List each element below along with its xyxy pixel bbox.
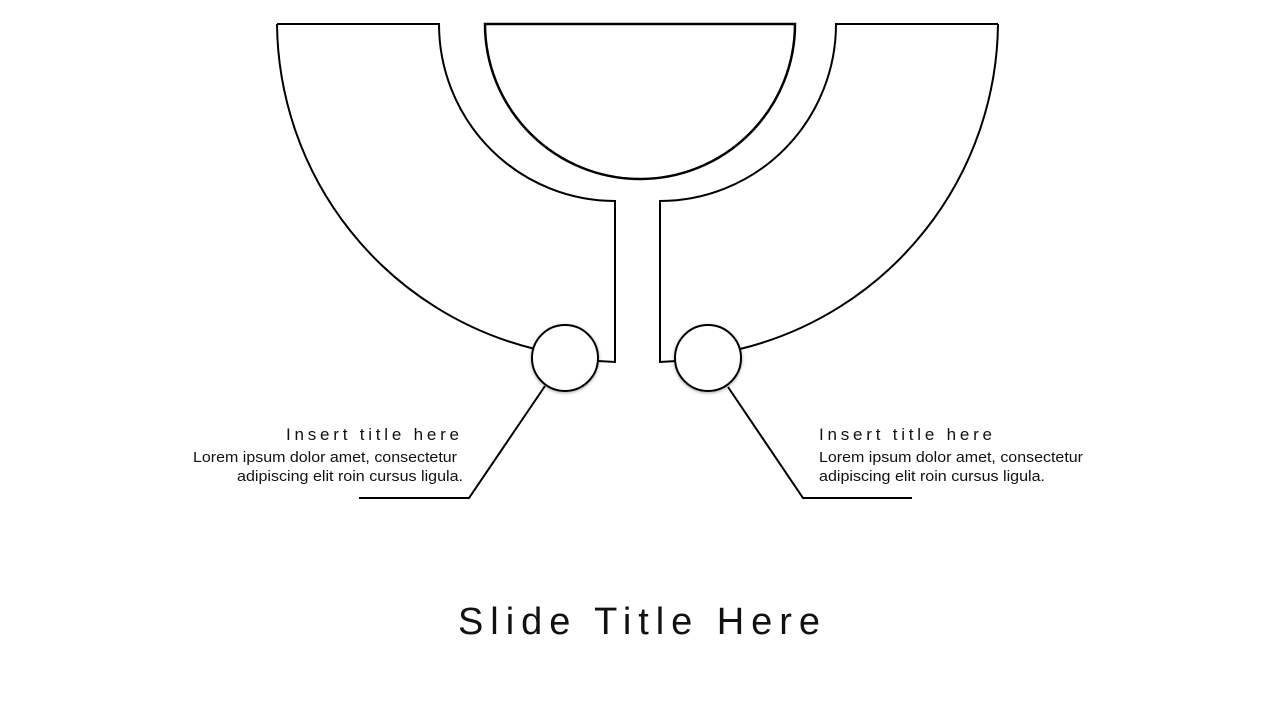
left node circle — [532, 325, 598, 391]
left text block: Insert title here — [286, 425, 459, 444]
right text block: adipiscing elit roin cursus ligula. — [819, 468, 1045, 485]
right text block: Insert title here — [819, 425, 992, 444]
left connector line — [359, 386, 545, 498]
left text block — [193, 425, 463, 485]
right text block: Lorem ipsum dolor amet, consectetur — [819, 449, 1083, 466]
left quarter-ring shape — [277, 24, 615, 362]
right connector line — [728, 387, 912, 498]
right node circle — [675, 325, 741, 391]
center semicircle — [485, 24, 795, 179]
left text block: adipiscing elit roin cursus ligula. — [237, 468, 463, 485]
right text block — [819, 425, 1083, 485]
right quarter-ring shape — [660, 24, 998, 362]
slide title: Slide Title Here — [458, 601, 820, 643]
left text block: Lorem ipsum dolor amet, consectetur — [193, 449, 457, 466]
